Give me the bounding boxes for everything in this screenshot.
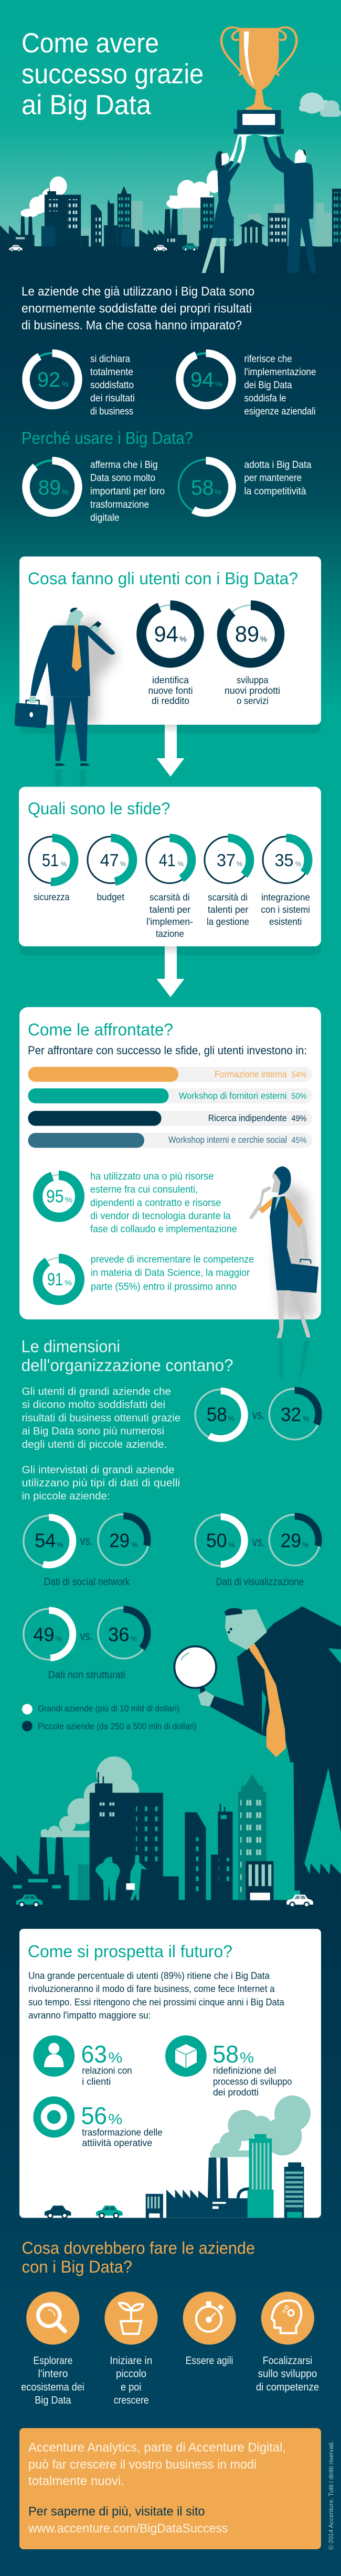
gauge: 58% vs 32%: %	[228, 1414, 235, 1423]
stat: 63%: i clienti	[82, 2076, 111, 2087]
figure: man holding trophy	[257, 135, 316, 273]
gauge: visualizzazione 50% vs 29%: vs.	[252, 1535, 265, 1549]
stat: 58%: %	[240, 2049, 254, 2066]
gauge: 37%	[205, 836, 251, 883]
teal gap under arm	[262, 1689, 267, 1735]
donut: 95%	[37, 1175, 80, 1218]
low buildings with teal windows	[41, 226, 135, 247]
gauge: 41%	[146, 836, 193, 883]
labels: sicurezza	[34, 891, 70, 902]
panel: quali sono le sfide	[19, 787, 321, 955]
teal tower	[238, 1774, 267, 1900]
text: 89%: o servizi	[237, 695, 269, 706]
figure: small man	[95, 1857, 120, 1906]
gauge: visualizzazione 50% vs 29%: %	[302, 1540, 308, 1548]
label: focalizzarsi	[256, 2355, 319, 2393]
text: intervistati	[22, 1464, 180, 1502]
smoke cloud	[41, 1756, 139, 1838]
text: accenture analytics: totalmente nuovi.	[28, 2474, 124, 2488]
label: iniziare: Iniziare in	[110, 2355, 152, 2366]
paragraph: Una grande percentuale di utenti (89%) ritiene che i Big Data	[28, 1970, 270, 1981]
labels: con i sistemi	[261, 904, 310, 915]
figure: woman holding trophy	[202, 135, 253, 273]
teal building	[78, 1864, 90, 1901]
teal tower	[248, 2134, 273, 2218]
label: iniziare: e poi	[121, 2382, 141, 2393]
low building	[146, 2194, 163, 2218]
car	[96, 2206, 123, 2218]
bar: ricerca indipendente: Ricerca indipendente	[208, 1113, 287, 1123]
icon: small car	[154, 245, 167, 252]
intro text: Le aziende che già utilizzano i Big Data sono	[22, 285, 254, 299]
text: accenture analytics	[28, 2440, 286, 2488]
heading: cosa dovrebbero fare le aziende	[22, 2239, 255, 2276]
gauge: visualizzazione 50% vs 29%: 50	[206, 1530, 227, 1551]
ground	[0, 247, 341, 268]
gauge: 58% vs 32%: 32	[281, 1404, 301, 1425]
windows	[13, 1803, 271, 1901]
label: esplorare	[21, 2355, 84, 2406]
gauge: 35%	[263, 836, 310, 883]
gauge: 41%: 41	[159, 850, 175, 870]
gauge: 94%	[179, 353, 232, 406]
gauge: 89%: %	[62, 488, 69, 497]
copyright: © 2014 Accenture. Tutti i diritti riservati.	[327, 2441, 335, 2550]
intro text	[22, 285, 254, 332]
text: 94%: dei Big Data	[244, 379, 292, 391]
smoke cloud	[210, 2095, 311, 2158]
legend: Grandi aziende (più di 10 mld di dollari)	[38, 1704, 179, 1713]
text: intervistati: Gli intervistati di grandi aziende	[22, 1464, 174, 1476]
text: 89%: afferma che i Big	[90, 459, 157, 471]
labels: budget	[97, 891, 124, 902]
stat: 56%: trasformazione delle	[82, 2127, 163, 2138]
text: grandi aziende soddisfatti: Gli utenti di grandi aziende che	[22, 1386, 171, 1398]
bar: workshop interni: Workshop interni e cerchie social	[168, 1134, 287, 1145]
bar: workshop fornitori: 50%	[291, 1092, 307, 1101]
text: 95%: esterne fra cui consulenti,	[90, 1184, 198, 1195]
label: iniziare: crescere	[114, 2395, 149, 2406]
text: 89%	[90, 459, 165, 523]
heading: Come si prospetta il futuro?	[28, 1942, 232, 1961]
subheading: Per affrontare con successo le sfide, gli utenti investono in:	[28, 1044, 307, 1057]
gauge: social network 54% vs 29%: %	[57, 1540, 63, 1548]
hair	[225, 1608, 242, 1616]
text: 91%: in materia di Data Science, la maggior	[91, 1267, 250, 1279]
heading: le dimensioni dell'organizzazione	[22, 1337, 233, 1375]
text: 89%: digitale	[90, 512, 120, 523]
car	[286, 1895, 313, 1907]
text: 95%: fase di collaudo e implementazione	[90, 1224, 237, 1235]
stat: 63%	[33, 2035, 132, 2087]
stat: 63%: relazioni con	[82, 2065, 132, 2076]
label: focalizzarsi: Focalizzarsi	[263, 2355, 312, 2366]
gauge: 47%: 47	[100, 850, 119, 870]
text: 92%	[90, 353, 135, 417]
legend	[22, 1704, 197, 1731]
text: 58%: la competitività	[244, 485, 306, 497]
stat: 58%: 58	[212, 2040, 239, 2068]
stat: 56%: %	[108, 2111, 122, 2127]
paragraph	[28, 1970, 285, 2021]
arrow	[156, 725, 185, 777]
text: 95%: ha utilizzato una o più risorse	[90, 1171, 214, 1182]
text: 91%	[91, 1253, 254, 1292]
icon: explore magnifier	[26, 2291, 79, 2344]
gauge: non strutturati 49% vs 36%: 49	[33, 1624, 55, 1645]
bar: workshop interni: 45%	[291, 1136, 307, 1145]
labels: l'implemen-	[146, 916, 193, 927]
panel: come le affrontate	[19, 1007, 321, 1319]
stat: 58%: dei prodotti	[213, 2087, 259, 2098]
text: 89%: sviluppa	[237, 674, 269, 685]
labels: scarsità di	[150, 892, 190, 903]
eyes	[228, 1628, 232, 1633]
donut: 95%: 95	[46, 1186, 64, 1206]
title: Come avere	[22, 28, 159, 59]
bar: workshop interni	[28, 1133, 312, 1148]
car	[45, 2206, 71, 2218]
text: intervistati: utilizzano più tipi di dati di quelli	[22, 1478, 180, 1489]
text: 94%	[244, 353, 316, 417]
text: 92%: si dichiara	[90, 353, 130, 365]
gauge: 47%: %	[120, 860, 126, 868]
background: teal middle band	[0, 707, 341, 1902]
text: grandi aziende soddisfatti: si dicono molto soddisfatti dei	[22, 1399, 165, 1411]
gauge: 89%: 89	[235, 621, 259, 647]
lit windows	[16, 192, 341, 245]
title	[22, 28, 204, 121]
intro text: enormemente soddisfatte dei propri risultati	[22, 302, 252, 315]
gauge: visualizzazione 50% vs 29%	[195, 1514, 320, 1588]
text: 89%: Data sono molto	[90, 472, 155, 484]
labels: la gestione	[207, 916, 249, 927]
gauge: social network 54% vs 29%: 54	[35, 1530, 56, 1551]
labels: talenti per	[150, 904, 190, 915]
gauge: non strutturati 49% vs 36%: vs.	[80, 1629, 93, 1643]
heading: Cosa fanno gli utenti con i Big Data?	[28, 569, 298, 588]
text: 94%: identifica	[152, 674, 189, 685]
labels: esistenti	[269, 916, 302, 927]
giant man suit	[210, 1607, 341, 1903]
text: 91%: prevede di incrementare le competenze	[91, 1253, 254, 1265]
label: esplorare: ecosistema dei	[21, 2382, 84, 2393]
gauge: 94%	[142, 605, 199, 663]
giant man tie	[249, 1643, 286, 1758]
gauge: social network 54% vs 29%: 29	[109, 1530, 130, 1551]
gauge: 92%	[26, 353, 79, 406]
paragraph: rivoluzioneranno il modo di fare business, come fece Internet a	[28, 1983, 275, 1994]
stat: 56%: 56	[81, 2102, 107, 2129]
text: grandi aziende soddisfatti: degli utenti di piccole aziende.	[22, 1439, 167, 1450]
gauge: 89%	[26, 461, 79, 513]
text: 58%: adotta i Big Data	[244, 459, 312, 471]
panel: cosa fanno gli utenti	[19, 556, 321, 734]
label: iniziare	[110, 2355, 152, 2406]
gauge: 94%: %	[215, 380, 222, 389]
gauge: social network 54% vs 29%: %	[131, 1540, 137, 1548]
woman reflection	[280, 1341, 310, 1378]
panel: call to action	[19, 2428, 321, 2549]
figure: small woman	[129, 1855, 147, 1906]
donut: 91%	[37, 1258, 80, 1301]
paragraph: avranno l'impatto maggiore su:	[28, 2010, 151, 2021]
bar: formazione interna	[28, 1067, 312, 1082]
text: 95%: dipendenti a contratto e risorse	[90, 1197, 221, 1208]
donut: 91%: 91	[47, 1270, 63, 1290]
figure: woman with briefcase	[249, 1166, 318, 1378]
bar: ricerca indipendente	[28, 1111, 312, 1126]
gauge: 94%: 94	[190, 368, 214, 391]
gauge: 51%	[29, 836, 76, 883]
text: 92%: di business	[90, 406, 133, 417]
labels: integrazione	[261, 892, 310, 903]
gauge: 37%: %	[237, 860, 242, 868]
gauge: non strutturati 49% vs 36%: %	[131, 1634, 137, 1643]
right building	[284, 2163, 304, 2218]
man shadow	[52, 618, 118, 725]
gauge: social network 54% vs 29%	[24, 1514, 149, 1588]
text: 95%: di vendor di tecnologia durante la	[90, 1210, 231, 1222]
text: 94%: nuove fonti	[148, 685, 193, 696]
gauge: 58%	[178, 460, 233, 514]
text: grandi aziende soddisfatti: risultati di business ottenuti grazie	[22, 1412, 180, 1424]
text: per saperne di più: Per saperne di più, visitate il sito	[28, 2505, 205, 2519]
heading: Perché usare i Big Data: Perché usare i Big Data?	[22, 429, 193, 447]
heading: le dimensioni dell'organizzazione: Le dimensioni	[22, 1337, 120, 1356]
gauge: non strutturati 49% vs 36%: %	[56, 1634, 62, 1643]
intro text: di business. Ma che cosa hanno imparato?	[22, 319, 242, 332]
man reflection	[56, 770, 86, 786]
donut: 91%: %	[65, 1279, 72, 1287]
stat: 58%: ridefinizione del	[213, 2065, 276, 2076]
gauge: non strutturati 49% vs 36%	[24, 1608, 149, 1680]
small briefcase	[126, 1883, 135, 1890]
gauge: 35%: 35	[275, 850, 294, 870]
car	[16, 1895, 42, 1907]
label: esplorare: l'intero	[38, 2368, 68, 2380]
gauge: 58%: 58	[191, 476, 214, 499]
gauge: 47%	[88, 836, 134, 883]
text: 89%: importanti per loro	[90, 485, 165, 497]
bar: formazione interna: Formazione interna	[215, 1069, 287, 1079]
text: 94%	[148, 674, 193, 706]
text: 94%: soddisfa le	[244, 392, 286, 404]
illustration: factory skyline	[45, 2095, 311, 2218]
icon: pale clouds at right	[299, 93, 341, 117]
title: successo grazie	[22, 59, 204, 90]
text: grandi aziende soddisfatti	[22, 1386, 180, 1450]
gauge: 89%: %	[260, 635, 267, 643]
paragraph: suo tempo. Essi ritengono che nei prossimi cinque anni i Big Data	[28, 1996, 285, 2007]
dark buildings	[0, 1772, 273, 1903]
gauge: 51%: %	[61, 860, 67, 868]
gauge: visualizzazione 50% vs 29%: Dati di visualizzazione	[216, 1577, 304, 1588]
stat: 63%: 63	[81, 2040, 107, 2068]
gauge: 58% vs 32%: 58	[207, 1404, 227, 1425]
stat: 58%: processo di sviluppo	[213, 2076, 292, 2087]
icon: small car	[9, 245, 23, 252]
bar: workshop fornitori: Workshop di fornitori esterni	[179, 1090, 287, 1101]
temple columns	[244, 227, 258, 243]
gauge: visualizzazione 50% vs 29%: %	[228, 1540, 235, 1548]
gauge: visualizzazione 50% vs 29%: 29	[281, 1530, 301, 1551]
gauge: non strutturati 49% vs 36%: 36	[108, 1624, 130, 1645]
labels	[34, 891, 310, 939]
buildings	[0, 185, 341, 247]
illustration: city with giant man	[0, 1607, 341, 1928]
label: focalizzarsi: di competenze	[256, 2382, 319, 2393]
icon: magnifier	[174, 1646, 216, 1707]
label: essere agili: Essere agili	[186, 2355, 233, 2366]
icon: van	[182, 243, 198, 251]
text: 92%: dei risultati	[90, 392, 135, 404]
panel: come si prospetta il futuro	[19, 1929, 321, 2218]
background: dark to teal gradient	[0, 246, 341, 707]
gauge: 51%: 51	[42, 850, 59, 870]
factory	[166, 2158, 248, 2218]
gauge: 89%: 89	[38, 476, 61, 499]
background: sky gradient	[0, 0, 341, 252]
text: 91%: parte (55%) entro il prossimo anno	[91, 1281, 237, 1292]
gauge: 58%: %	[215, 488, 221, 497]
heading: cosa dovrebbero fare le aziende: Cosa dovrebbero fare le aziende	[22, 2239, 255, 2257]
heading: Quali sono le sfide?	[28, 799, 170, 818]
background buildings	[80, 201, 333, 247]
text: accenture analytics: Accenture Analytics, parte di Accenture Digital,	[28, 2440, 286, 2454]
stat: 56%	[33, 2097, 163, 2148]
gauge: 94%: %	[179, 635, 187, 643]
heading: Come le affrontate?	[28, 1020, 173, 1039]
illustration: header city skyline	[0, 27, 341, 273]
gauge: social network 54% vs 29%: Dati di social network	[44, 1577, 130, 1588]
icon: trophy	[221, 27, 296, 134]
background: dark lower band	[0, 1900, 341, 2576]
labels: talenti per	[208, 904, 248, 915]
heading: le dimensioni dell'organizzazione: dell'organizzazione contano?	[22, 1356, 233, 1375]
text: accenture analytics: può far crescere il vostro business in modi	[28, 2458, 257, 2472]
label: esplorare: Big Data	[35, 2395, 71, 2406]
text: 94%: di reddito	[152, 695, 189, 706]
donut: 95%: %	[65, 1196, 72, 1204]
bar: workshop fornitori	[28, 1088, 312, 1104]
text: url: www.accenture.com/BigDataSuccess	[28, 2522, 228, 2536]
heading: cosa dovrebbero fare le aziende: con i Big Data?	[22, 2257, 132, 2276]
text: 89%	[225, 674, 280, 706]
arrow	[156, 946, 185, 997]
title: ai Big Data	[22, 90, 151, 121]
bar: formazione interna: 54%	[291, 1071, 307, 1079]
text: 94%: l'implementazione	[244, 366, 316, 378]
text: 58%	[244, 459, 312, 497]
label: esplorare: Esplorare	[33, 2355, 72, 2366]
figure: man with briefcase and phone	[15, 608, 115, 786]
gauge: 37%: 37	[217, 850, 236, 870]
bar: ricerca indipendente: 49%	[291, 1114, 307, 1123]
gauge: social network 54% vs 29%: vs.	[80, 1534, 93, 1548]
gauge: 35%: %	[295, 860, 301, 868]
gauge: 92%: 92	[37, 368, 60, 391]
gauge: 58% vs 32%: vs.	[252, 1408, 265, 1422]
stat: 56%: attiività operative	[82, 2137, 152, 2148]
icon: plant	[104, 2291, 158, 2344]
gauge: non strutturati 49% vs 36%: Dati non strutturati	[48, 1669, 125, 1680]
text: 94%: esigenze aziendali	[244, 406, 316, 417]
labels: scarsità di	[208, 892, 248, 903]
label: focalizzarsi: sullo sviluppo	[258, 2368, 317, 2380]
text: 58%: per mantenere	[244, 472, 302, 484]
pipe	[238, 2189, 249, 2198]
ground	[0, 1900, 341, 1928]
text: intervistati: in piccole aziende:	[22, 1491, 110, 1502]
text: 94%: riferisce che	[244, 353, 292, 365]
text: 92%: totalmente	[90, 366, 133, 378]
label: iniziare: piccolo	[116, 2368, 146, 2380]
gauge: 41%: %	[178, 860, 184, 868]
text: 89%: trasformazione	[90, 499, 149, 510]
stat: 63%: %	[108, 2049, 122, 2066]
labels: tazione	[156, 928, 184, 939]
text: grandi aziende soddisfatti: ai Big Data sono più numerosi	[22, 1426, 164, 1437]
gauge: 89%	[222, 605, 280, 663]
legend: Piccole aziende (da 250 a 500 mln di dollari)	[38, 1722, 197, 1731]
giant man head	[225, 1609, 267, 1650]
icon: head with gears	[261, 2291, 314, 2344]
factory windows	[212, 2202, 226, 2209]
icon: stopwatch	[183, 2291, 236, 2344]
icons row	[26, 2291, 314, 2344]
gauge: 58% vs 32%	[195, 1389, 320, 1440]
woman shadow	[275, 1179, 315, 1319]
stat: 58%	[165, 2035, 292, 2098]
gauge: 58% vs 32%: %	[303, 1414, 309, 1423]
gauge: 92%: %	[62, 380, 69, 389]
text: 92%: soddisfatto	[90, 379, 134, 391]
text: 95%	[90, 1171, 237, 1235]
gauge: 94%: 94	[154, 621, 178, 647]
icon: clouds	[20, 170, 222, 217]
text: 89%: nuovi prodotti	[225, 685, 280, 696]
